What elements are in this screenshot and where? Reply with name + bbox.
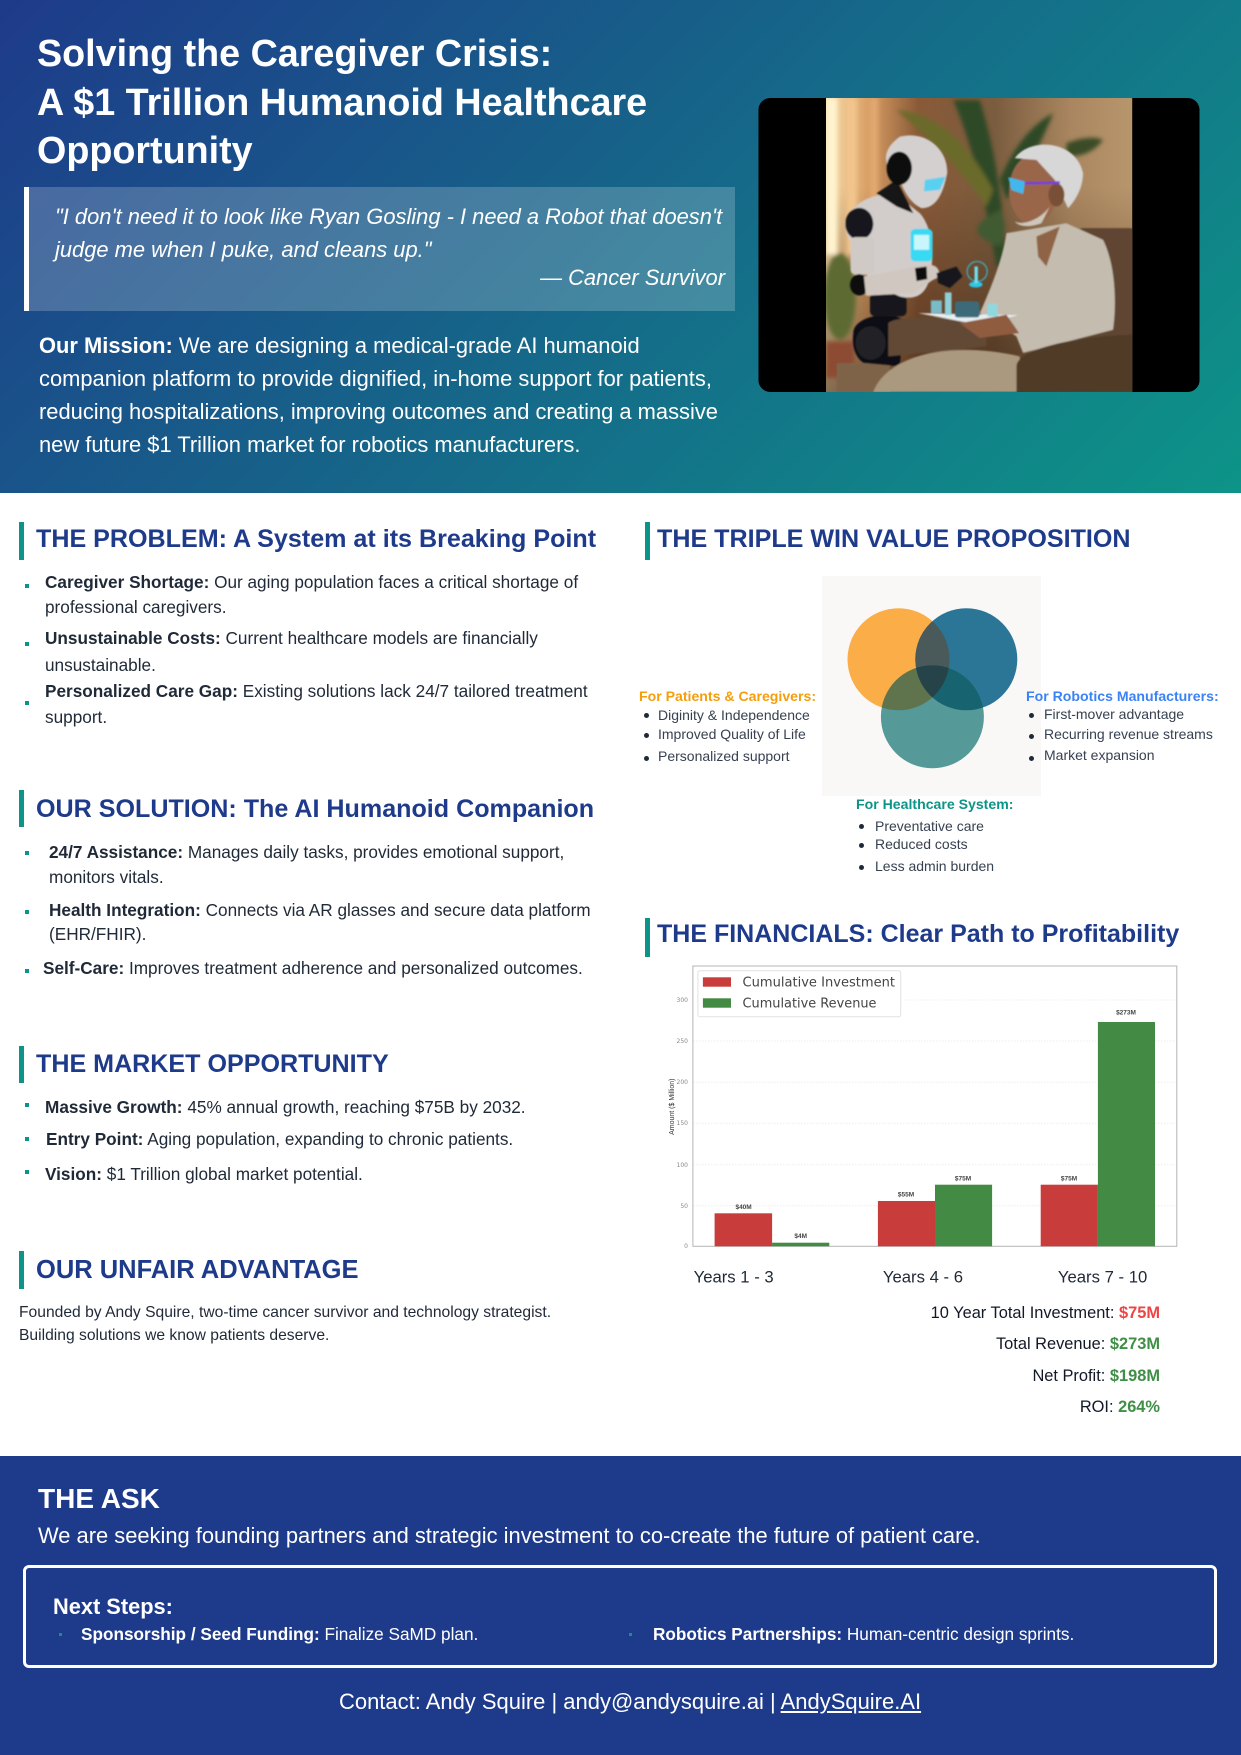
mission statement: reducing hospitalizations, improving outcomes and creating a massive [39, 399, 718, 424]
heading: unfair advantage [19, 1251, 359, 1289]
robotics manufacturers list: First-mover advantage [1044, 706, 1184, 722]
bar chart: $40M [735, 1204, 752, 1211]
heading: market opportunity: THE MARKET OPPORTUNITY [36, 1050, 389, 1078]
panel: the problem [19, 522, 596, 727]
bar chart: Cumulative Investment [742, 975, 895, 991]
quote box [24, 187, 735, 311]
healthcare system list: Preventative care [875, 818, 984, 834]
bar chart: Years 1 - 3 [694, 1268, 774, 1286]
patients and caregivers list: Personalized support [658, 748, 790, 764]
next step: funding: Sponsorship / Seed Funding: Finalize SaMD plan. [81, 1624, 478, 1644]
healthcare system list: For Healthcare System: [856, 796, 1013, 812]
healthcare system list [856, 796, 1013, 874]
problem bullet list: Personalized Care Gap: Existing solutions lack 24/7 tailored treatment [45, 681, 588, 701]
patients and caregivers list: Improved Quality of Life [658, 726, 806, 742]
problem bullet list: support. [45, 707, 107, 727]
man [980, 223, 1115, 353]
market bullet list: Vision: $1 Trillion global market potential. [45, 1164, 363, 1184]
panel: our solution [19, 790, 594, 978]
panel: the ask footer [0, 1456, 1241, 1755]
solution bullet list: (EHR/FHIR). [49, 924, 146, 944]
healthcare system list: Less admin burden [875, 858, 994, 874]
problem bullet list: professional caregivers. [45, 597, 227, 617]
heading: the ask: THE ASK [38, 1483, 160, 1514]
bar chart: Years 4 - 6 [883, 1268, 963, 1286]
founder text: Building solutions we know patients deserve. [19, 1326, 329, 1344]
heading: our solution: OUR SOLUTION: The AI Humanoid Companion [36, 795, 594, 823]
armchair arms [888, 317, 986, 356]
mission statement: companion platform to provide dignified, in-home support for patients, [39, 366, 712, 391]
quote box: "I don't need it to look like Ryan Gosling - I need a Robot that doesn't [55, 204, 722, 229]
financial summary: ROI: 264% [1080, 1398, 1160, 1416]
solution bullet list: Health Integration: Connects via AR glasses and secure data platform [49, 900, 591, 920]
founder text: Founded by Andy Squire, two-time cancer survivor and technology strategist. [19, 1304, 551, 1321]
next steps box [23, 1565, 1217, 1668]
bar chart: Years 7 - 10 [1058, 1268, 1147, 1286]
problem bullet list: unsustainable. [45, 655, 156, 675]
quote box: judge me when I puke, and cleans up." [55, 237, 432, 262]
solution bullet list: 24/7 Assistance: Manages daily tasks, provides emotional support, [49, 842, 564, 862]
bar chart: 300 [677, 997, 688, 1004]
header banner [0, 0, 1241, 493]
robot [853, 315, 903, 366]
ask statement: We are seeking founding partners and strategic investment to co-create the future of patient care. [38, 1523, 981, 1548]
robotics manufacturers list: For Robotics Manufacturers: [1026, 688, 1219, 704]
heading: triple win: THE TRIPLE WIN VALUE PROPOSITION [657, 525, 1131, 553]
bar chart: 150 [677, 1120, 688, 1127]
contact line: Contact: Andy Squire | andy@andysquire.ai | AndySquire.AI [339, 1689, 921, 1714]
bar chart: Amount ($ Million) [669, 1078, 676, 1135]
market bullet list: Massive Growth: 45% annual growth, reaching $75B by 2032. [45, 1097, 526, 1117]
market bullet list: Entry Point: Aging population, expanding to chronic patients. [46, 1129, 513, 1149]
illustration: robot caring for patient [758, 98, 1200, 392]
tray and hologram [918, 313, 1018, 325]
financial summary: Net Profit: $198M [1032, 1367, 1160, 1385]
solution bullet list: monitors vitals. [49, 867, 164, 887]
bar chart: Cumulative Revenue [742, 996, 876, 1012]
bar chart: 100 [677, 1162, 688, 1169]
robotics manufacturers list: Recurring revenue streams [1044, 726, 1213, 742]
patients and caregivers list: For Patients & Caregivers: [639, 688, 816, 704]
robotics manufacturers list [1026, 688, 1219, 763]
robotics manufacturers list: Market expansion [1044, 747, 1155, 763]
bar chart: $273M [1116, 1010, 1136, 1016]
next step: partnerships: Robotics Partnerships: Human-centric design sprints. [653, 1624, 1074, 1644]
market bullet list [25, 1097, 526, 1184]
heading: unfair advantage: OUR UNFAIR ADVANTAGE [36, 1256, 359, 1284]
mission statement [39, 333, 718, 457]
bar chart: $75M [955, 1176, 971, 1182]
patients and caregivers list [639, 688, 816, 764]
mission statement: new future $1 Trillion market for robotics manufacturers. [39, 432, 580, 457]
mission statement: Our Mission: We are designing a medical-grade AI humanoid [39, 333, 640, 358]
bar chart: $55M [898, 1192, 914, 1198]
bar chart: $4M [794, 1233, 807, 1240]
bar chart: 200 [677, 1079, 688, 1086]
panel: triple win value proposition [639, 522, 1219, 874]
panel: financials [645, 918, 1180, 1416]
bar chart: 50 [680, 1203, 688, 1210]
financial summary [931, 1304, 1160, 1416]
title: A $1 Trillion Humanoid Healthcare [37, 80, 647, 122]
healthcare system list: Reduced costs [875, 836, 968, 852]
panel: market opportunity [19, 1046, 526, 1184]
problem bullet list: Unsustainable Costs: Current healthcare models are financially [45, 628, 538, 648]
heading: the problem: THE PROBLEM: A System at its Breaking Point [36, 525, 596, 553]
quote box: — Cancer Survivor [540, 265, 725, 290]
problem bullet list [25, 572, 588, 727]
title: Solving the Caregiver Crisis: [37, 32, 552, 74]
bar chart: $75M [1061, 1176, 1077, 1182]
bar chart: 250 [677, 1038, 688, 1045]
solution bullet list [25, 842, 591, 978]
patients and caregivers list: Diginity & Independence [658, 707, 810, 723]
solution bullet list: Self-Care: Improves treatment adherence and personalized outcomes. [43, 958, 583, 978]
bar chart [668, 966, 1178, 1286]
financial summary: Total Revenue: $273M [996, 1335, 1160, 1353]
panel: unfair advantage [19, 1251, 551, 1344]
chair [1078, 227, 1132, 340]
next steps heading: Next Steps: [53, 1594, 173, 1619]
title [37, 32, 647, 171]
venn diagram [822, 576, 1041, 796]
title: Opportunity [37, 129, 253, 171]
problem bullet list: Caregiver Shortage: Our aging population faces a critical shortage of [45, 572, 578, 592]
bar chart: 0 [684, 1243, 688, 1250]
heading: financials: THE FINANCIALS: Clear Path to Profitability [657, 920, 1179, 948]
founder text [19, 1304, 551, 1344]
financial summary: 10 Year Total Investment: $75M [931, 1304, 1160, 1322]
